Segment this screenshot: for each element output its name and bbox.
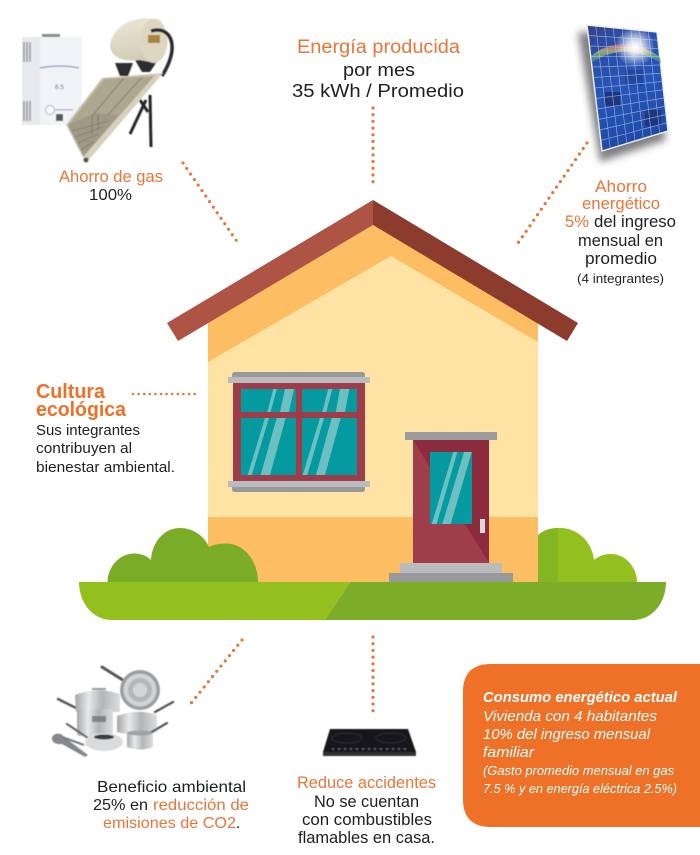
panel body text: 10% del ingreso mensual [483, 726, 651, 743]
dotted connector: top [371, 108, 375, 184]
icon: gas water heater: 6.5 [55, 84, 64, 91]
text block: reduces accidents: flamables en casa. [298, 829, 435, 847]
text block: environmental benefit: reducción de [153, 797, 249, 814]
roof left slope [167, 200, 373, 341]
text block: ecological culture: Cultura [36, 381, 106, 403]
heading: energy produced: por mes [343, 59, 415, 80]
dotted connector: cookware [188, 640, 242, 707]
text block: ecological culture: ecológica [36, 399, 127, 421]
icon: solar water collector and tank [66, 18, 172, 163]
text block: energy savings: promedio [585, 250, 657, 268]
dotted connector: ecological culture [133, 393, 196, 395]
roof right slope [373, 200, 578, 341]
text block: energy savings: 5% [565, 213, 589, 231]
house wall [208, 225, 538, 582]
text block: gas savings: 100% [89, 187, 132, 204]
text block: energy savings: Ahorro [595, 178, 647, 196]
text block: energy savings: (4 integrantes) [577, 271, 664, 286]
text block: energy savings: del ingreso [594, 213, 676, 231]
text block: energy savings: mensual en [578, 232, 663, 250]
panel: current energy consumption [463, 664, 700, 827]
panel body text: Vivienda con 4 habitantes [483, 708, 657, 725]
text block: ecological culture: bienestar ambiental. [36, 460, 175, 476]
panel heading: Consumo energético actual [483, 689, 678, 706]
text block: environmental benefit: 25% en [93, 797, 148, 814]
text block: reduces accidents: Reduce accidentes [297, 774, 436, 792]
dotted connector: solar panel [518, 143, 587, 243]
panel body text [483, 708, 677, 796]
door [405, 432, 497, 563]
panel body text: familiar [483, 744, 535, 761]
gable shadow [208, 225, 538, 362]
icon: gas water heater [22, 34, 82, 125]
icon: induction cooktop [323, 729, 416, 756]
icon: solar panel [578, 25, 668, 162]
text block: energy savings [565, 178, 676, 286]
dotted connector: cooktop [371, 637, 375, 711]
text block: environmental benefit: Beneficio ambiental [97, 779, 246, 796]
text block: ecological culture: Sus integrantes [36, 423, 140, 439]
dotted connector: gas savings [183, 163, 238, 243]
heading: energy produced [292, 37, 464, 101]
text block: ecological culture: contribuyen al [36, 441, 132, 457]
text block: energy savings: energético [582, 195, 660, 213]
text block: reduces accidents [297, 774, 436, 847]
text block: environmental benefit: emisiones de CO2 [103, 815, 236, 832]
heading: energy produced: 35 kWh / Promedio [292, 80, 464, 101]
text block: environmental benefit [93, 779, 249, 832]
heading: energy produced: Energía producida [297, 37, 460, 58]
ground [79, 582, 666, 620]
window [228, 372, 370, 492]
door steps [389, 563, 513, 582]
text block: ecological culture [36, 381, 175, 476]
text block: reduces accidents: No se cuentan [314, 793, 419, 811]
text block: gas savings [59, 168, 163, 204]
right bush [538, 528, 637, 582]
icon: cookware set [52, 667, 173, 757]
left bush [108, 528, 258, 582]
text block: gas savings: Ahorro de gas [59, 168, 163, 186]
text block: reduces accidents: con combustibles [302, 811, 432, 829]
house base band [208, 517, 538, 582]
house illustration [79, 200, 666, 620]
panel body text: (Gasto promedio mensual en gas [483, 763, 674, 778]
text block: environmental benefit: . [236, 815, 240, 832]
panel body text: 7.5 % y en energía eléctrica 2.5%) [483, 781, 677, 796]
